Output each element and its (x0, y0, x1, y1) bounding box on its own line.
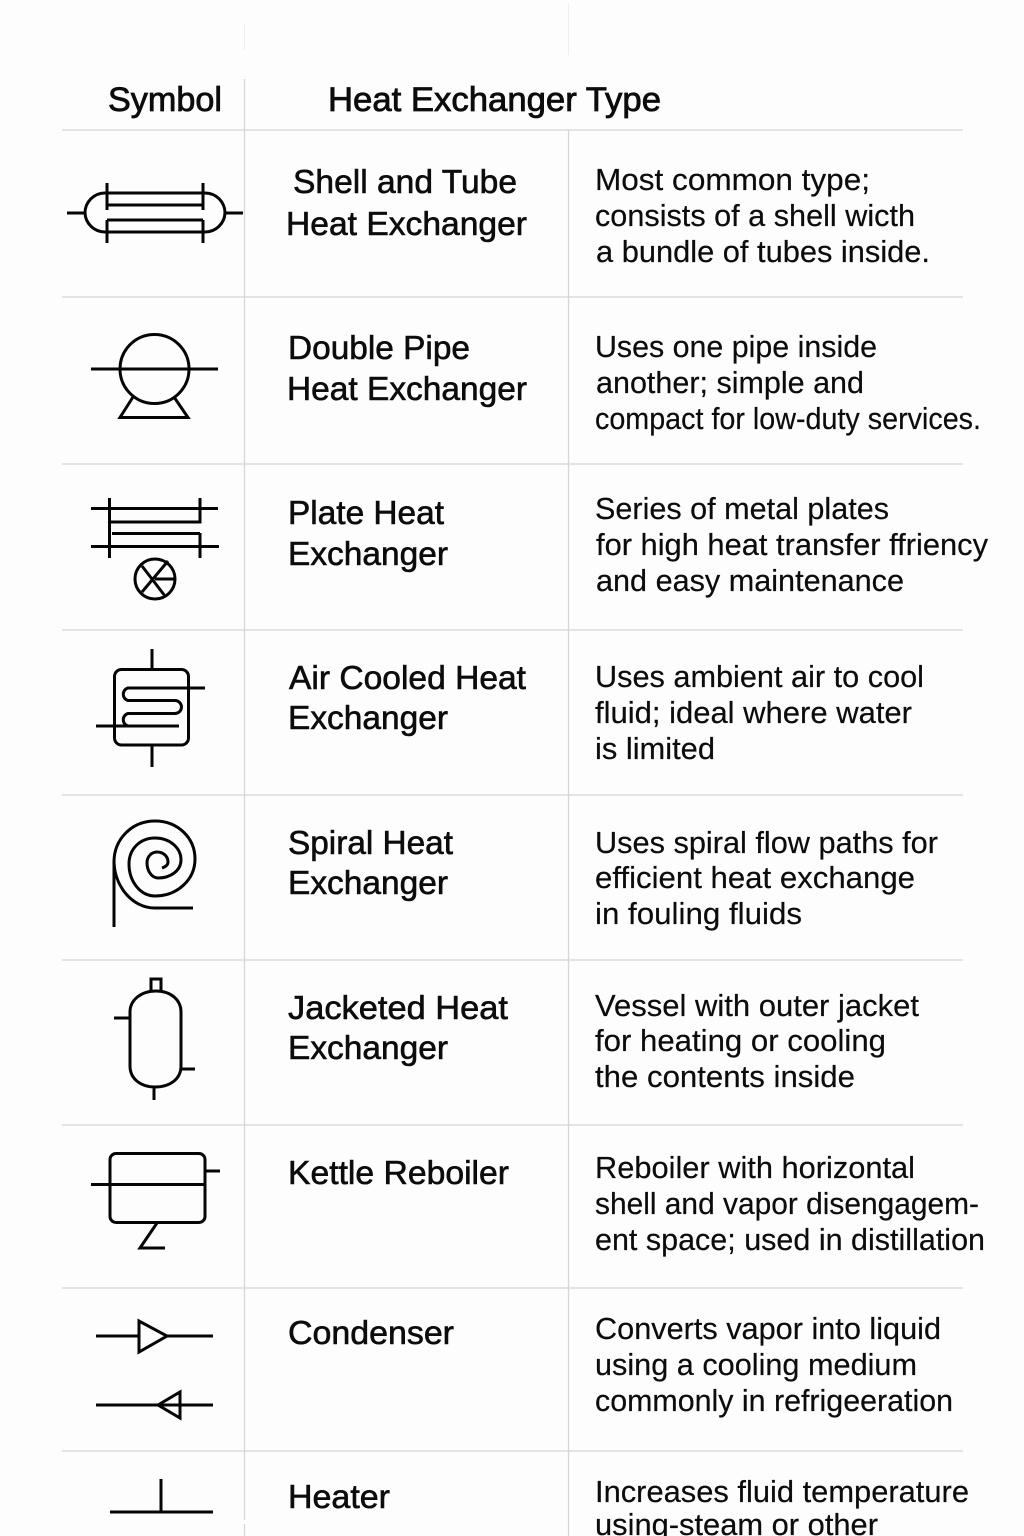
icon: condenser arrows (96, 1321, 213, 1418)
description: another; simple and (596, 365, 864, 400)
description (595, 491, 988, 598)
description: is limited (595, 731, 715, 766)
description: the contents inside (595, 1059, 855, 1094)
row: Kettle Reboiler (91, 1150, 985, 1257)
description (595, 1311, 953, 1418)
description: Uses spiral flow paths for (595, 825, 938, 860)
icon: heater (110, 1479, 213, 1512)
icon: kettle reboiler (110, 1154, 205, 1222)
type name (288, 494, 448, 572)
description: for heating or cooling (595, 1023, 886, 1058)
type name: Heat Exchanger (287, 370, 527, 407)
description: Most common type; (595, 162, 870, 197)
header: Heat Exchanger Type: Heat Exchanger Type (328, 81, 661, 119)
type name: Heat Exchanger (286, 205, 527, 242)
icon: spiral (114, 821, 195, 927)
description (595, 329, 981, 436)
description: Uses one pipe inside (595, 329, 877, 364)
description: a bundle of tubes inside. (596, 234, 930, 269)
type name (288, 989, 508, 1066)
description: shell and vapor disengagem- (595, 1186, 979, 1221)
type name (288, 824, 453, 901)
icon: jacketed vessel (114, 979, 195, 1100)
type name: Plate Heat (288, 494, 444, 531)
type name (288, 659, 526, 736)
description (595, 1474, 969, 1536)
description: Vessel with outer jacket (595, 988, 919, 1023)
type name: Spiral Heat (288, 824, 453, 861)
table header (108, 81, 661, 119)
description: using a cooling medium (595, 1347, 917, 1382)
description: Increases fluid temperature (595, 1474, 969, 1509)
row: Heater (110, 1474, 969, 1536)
icon: double pipe (91, 369, 218, 418)
type name (287, 329, 527, 407)
type name: Shell and Tube (293, 163, 517, 200)
description: commonly in refrigeeration (595, 1383, 953, 1418)
header: Symbol: Symbol (108, 81, 222, 119)
description (595, 988, 919, 1094)
icon: plate (91, 498, 219, 558)
description: compact for low-duty services. (595, 401, 981, 436)
description: ent space; used in distillation (595, 1222, 985, 1257)
description: and easy maintenance (596, 563, 904, 598)
description: for high heat transfer ffriency (596, 527, 988, 562)
description: in fouling fluids (595, 896, 802, 931)
description (595, 162, 930, 269)
description: consists of a shell wicth (595, 198, 915, 233)
icon: air cooled (114, 670, 188, 745)
description: efficient heat exchange (595, 860, 915, 895)
row: Condenser (96, 1311, 953, 1418)
row: Shell and Tube Heat Exchanger (67, 162, 930, 269)
icon: shell and tube (67, 183, 243, 243)
description: fluid; ideal where water (595, 695, 912, 730)
row: Spiral Heat Exchanger (114, 821, 938, 931)
row: Plate Heat Exchanger (91, 491, 988, 599)
row: Jacketed Heat Exchanger (114, 979, 919, 1100)
type name: Exchanger (288, 699, 448, 736)
description: Reboiler with horizontal (595, 1150, 915, 1185)
description (595, 1150, 985, 1257)
type name: Exchanger (288, 1029, 448, 1066)
type name: Exchanger (288, 864, 448, 901)
type name: Exchanger (288, 535, 448, 572)
row: Double Pipe Heat Exchanger (91, 329, 981, 436)
description: Uses ambient air to cool (595, 659, 924, 694)
description: Series of metal plates (595, 491, 889, 526)
type name: Condenser (288, 1314, 454, 1351)
type name: Heater (288, 1478, 390, 1515)
row: Air Cooled Heat Exchanger (96, 649, 924, 767)
description (595, 659, 924, 766)
description: Converts vapor into liquid (595, 1311, 941, 1346)
description (595, 825, 938, 931)
type name: Air Cooled Heat (289, 659, 526, 696)
type name (286, 163, 527, 242)
type name: Jacketed Heat (288, 989, 508, 1026)
type name: Kettle Reboiler (288, 1154, 509, 1191)
type name: Double Pipe (288, 329, 470, 366)
